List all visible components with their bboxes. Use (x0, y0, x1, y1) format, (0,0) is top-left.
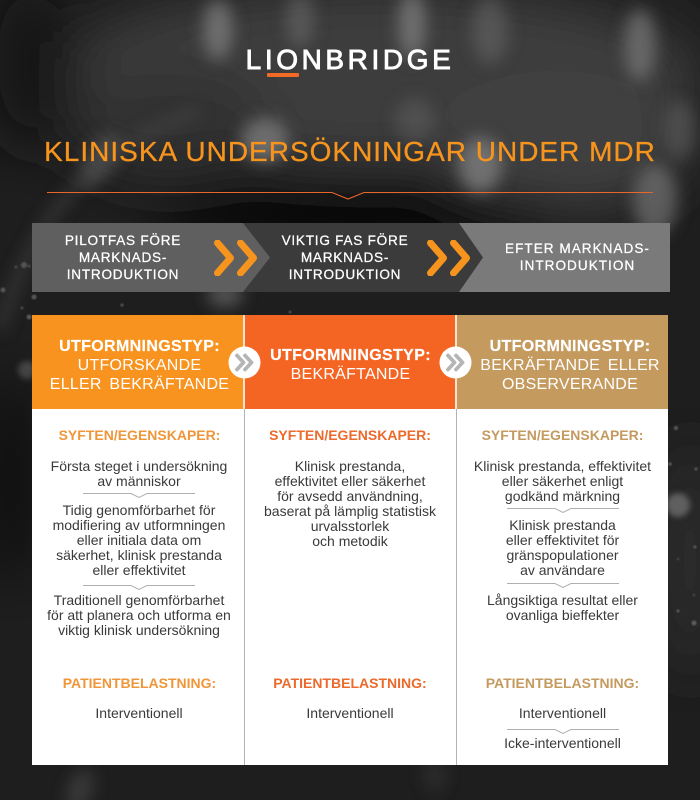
bokeh side circles (18, 361, 690, 517)
arrow: double chevron 1 (214, 240, 257, 276)
arrow: double chevron 2 (427, 240, 470, 276)
text: column 2 item: effektivitet eller säkerhet (275, 472, 425, 488)
text: column 2 item: och metodik (312, 532, 388, 548)
text: column 1 item 2: Tidig genomförbarhet för (63, 502, 215, 518)
title divider with notch (47, 192, 653, 200)
text: burden column 2: Interventionell (306, 705, 394, 721)
header text: column 1: UTFORMNINGSTYP: (59, 338, 220, 355)
section heading: patient burden column 3: PATIENTBELASTNING: (486, 675, 639, 691)
icon: header arrow 2 (440, 346, 472, 378)
phase label: pilot (65, 233, 181, 282)
logo underline bar (267, 73, 299, 77)
phase label: post-market (505, 241, 650, 273)
column header: confirmatory (244, 315, 457, 409)
text: column 1 item 3: för att planera och utforma en (47, 607, 231, 623)
column header: observational (457, 315, 668, 409)
chevron shapes (32, 223, 670, 292)
text: column 1 item 2: eller effektivitet (92, 562, 186, 578)
text: column 3 item 3 (487, 592, 638, 623)
text: burden column 1: Interventionell (95, 705, 183, 721)
text: column 3 item 3: Långsiktiga resultat eller (487, 592, 638, 608)
header separator 1 (243, 315, 245, 409)
header text: column 3: OBSERVERANDE (502, 376, 638, 393)
text: column 1 item 2: eller initiala data om (77, 532, 201, 548)
icon: header arrow 1 (228, 346, 260, 378)
text: column 3 item 1: godkänd märkning (505, 488, 620, 504)
text: column 1 item 3: Traditionell genomförbarhet (54, 592, 224, 608)
text: column 3 item 2: gränspopulationer (506, 547, 619, 563)
header text: column 1: UTFORSKANDE (78, 357, 201, 374)
text: burden column 3 second: Icke-interventionell (504, 735, 621, 751)
title: KLINISKA UNDERSÖKNINGAR UNDER MDR (44, 136, 656, 167)
phase label: pilot: INTRODUKTION (67, 267, 179, 282)
phase label: pivotal (282, 233, 408, 282)
text: column 1 item 2: modifiering av utformningen (53, 517, 225, 533)
comparison table panel (32, 315, 668, 765)
header text: column 3 (480, 338, 660, 393)
text: column 2 item: Klinisk prestanda, (295, 458, 405, 474)
header text: column 2: BEKRÄFTANDE (291, 366, 410, 382)
text: column 1 item 3 (47, 592, 231, 638)
column separator 1 (244, 315, 245, 765)
text: column 2 item: baserat på lämplig statistisk (264, 502, 436, 518)
header text: column 2 (270, 346, 431, 382)
text: column 1 item 2 (53, 502, 225, 578)
text: column 3 item 1: eller säkerhet enligt (502, 472, 623, 488)
phase chevron bar (32, 223, 670, 292)
text: column 1 item 1: av människor (97, 472, 181, 488)
divider notch (507, 583, 619, 588)
text: column 3 item 2: eller effektivitet för (506, 532, 619, 548)
logo wordmark: LIONBRIDGE (246, 44, 454, 74)
section heading: purposes column 2: SYFTEN/EGENSKAPER: (269, 427, 431, 443)
section heading: patient burden column 1: PATIENTBELASTNING: (63, 675, 216, 691)
header text: column 3: BEKRÄFTANDE ELLER (480, 357, 660, 374)
phase label: pivotal: VIKTIG FAS FÖRE (282, 233, 408, 248)
header text: column 3: UTFORMNINGSTYP: (490, 338, 650, 355)
phase label: pivotal: MARKNADS- (301, 250, 389, 265)
text: column 3 item 1: Klinisk prestanda, effektivitet (474, 458, 651, 474)
text: column 1 item 3: viktig klinisk undersökning (58, 622, 220, 638)
text: column 1 item 1 (51, 458, 227, 488)
header text: column 1: ELLER BEKRÄFTANDE (50, 376, 229, 393)
text: column 3 item 1 (474, 458, 651, 504)
column separator 2 (456, 315, 457, 765)
phase label: post-market: EFTER MARKNADS- (505, 241, 650, 256)
section heading: patient burden column 2: PATIENTBELASTNING: (273, 675, 427, 691)
logo: Lionbridge (246, 44, 454, 77)
phase label: pivotal: INTRODUKTION (289, 267, 401, 282)
divider notch (507, 508, 619, 513)
divider notch (507, 729, 619, 734)
phase label: pilot: MARKNADS- (79, 250, 167, 265)
column header: exploratory (32, 315, 244, 409)
text: column 1 item 2: säkerhet, klinisk prestanda (56, 547, 222, 563)
header text: column 1 (50, 338, 229, 393)
text: column 3 item 2: Klinisk prestanda (509, 517, 616, 533)
text: burden column 3 first: Interventionell (519, 705, 606, 721)
text: column 2 item (264, 458, 436, 548)
text: column 2 item: urvalsstorlek (311, 518, 389, 534)
section heading: purposes column 1: SYFTEN/EGENSKAPER: (59, 427, 220, 443)
phase label: post-market: INTRODUKTION (520, 258, 635, 273)
phase label: pilot: PILOTFAS FÖRE (65, 233, 181, 248)
text: column 3 item 2: av användare (520, 562, 605, 578)
header separator 2 (455, 315, 457, 409)
text: column 2 item: för avsedd användning, (277, 488, 423, 504)
header text: column 2: UTFORMNINGSTYP: (270, 346, 431, 364)
text: column 3 item 2 (506, 517, 619, 578)
section heading: purposes column 3: SYFTEN/EGENSKAPER: (482, 427, 643, 443)
divider notch (83, 493, 195, 498)
text: column 3 item 3: ovanliga bieffekter (506, 607, 619, 623)
text: column 1 item 1: Första steget i undersökning (51, 458, 227, 474)
divider notch (83, 585, 195, 590)
